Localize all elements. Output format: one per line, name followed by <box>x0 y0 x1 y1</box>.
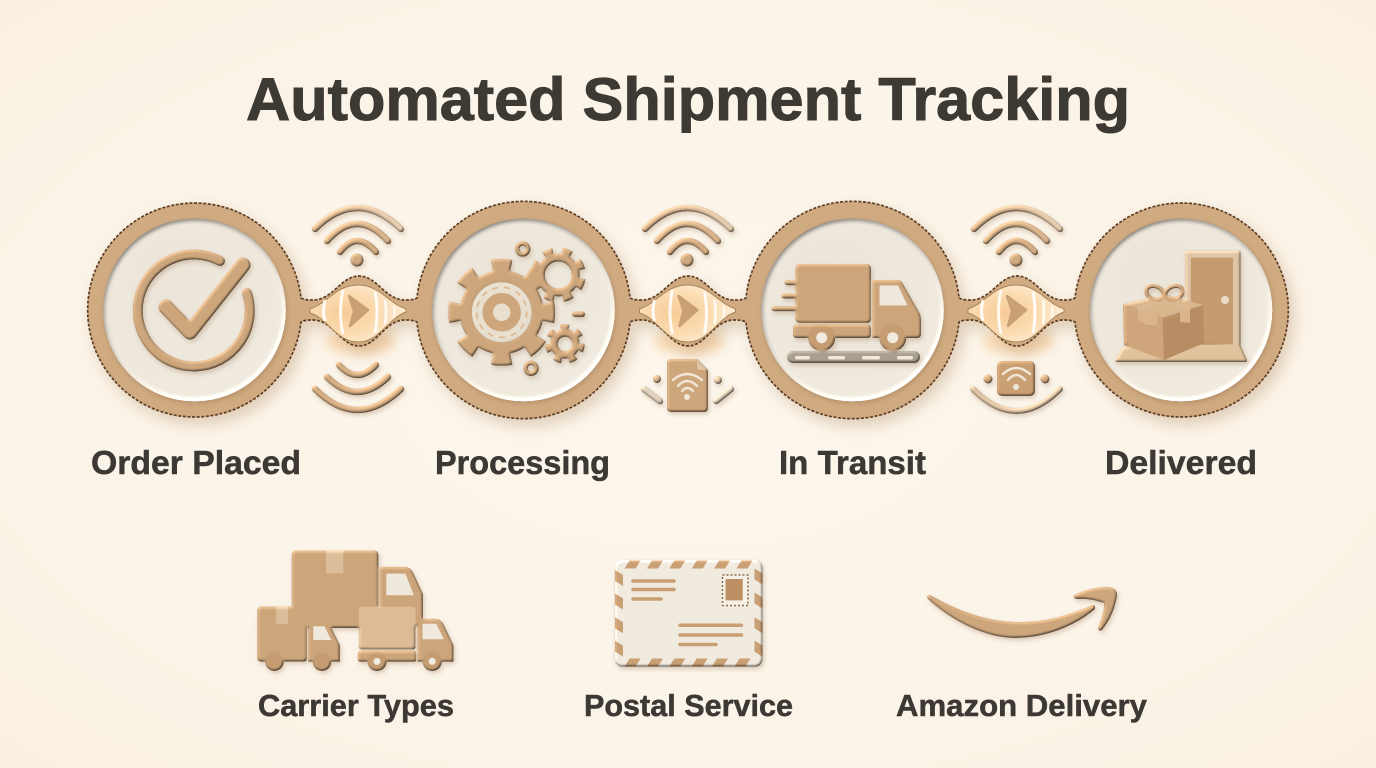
step 1: order placed disc <box>103 218 286 402</box>
connector 3: glowing arrow <box>968 285 1064 342</box>
icon: amazon smile arrow <box>927 587 1117 638</box>
label: amazon delivery: Amazon Delivery <box>896 689 1147 723</box>
label: carrier types: Carrier Types <box>258 689 454 723</box>
label: delivered: Delivered <box>1105 444 1257 481</box>
glow under connectors <box>324 329 1054 355</box>
step 4: delivered disc <box>1090 218 1272 402</box>
signal: inverted wifi below connector 1 <box>315 365 401 410</box>
small right truck <box>358 607 454 671</box>
step 2: processing disc <box>432 218 615 402</box>
label: in transit: In Transit <box>779 444 926 481</box>
signal: wifi document below connector 2 <box>644 359 731 412</box>
connector 2: glowing arrow <box>640 285 736 342</box>
label: processing: Processing <box>435 444 610 481</box>
icon: carrier trucks <box>257 550 454 671</box>
small left truck <box>257 607 340 671</box>
cardboard chain band <box>88 201 1288 419</box>
connector 1: glowing arrow <box>310 285 406 342</box>
signal: wifi above connector 1 <box>315 208 401 266</box>
icon: check mark in ring <box>138 254 250 366</box>
signal: wifi above connector 3 <box>974 208 1060 266</box>
label: postal service: Postal Service <box>584 689 793 723</box>
signal: wifi above connector 2 <box>645 208 731 266</box>
large truck <box>292 550 423 628</box>
icon: parcel at door <box>1115 251 1247 362</box>
signal: wifi chip below connector 3 <box>973 361 1060 411</box>
icon: gears <box>454 244 590 374</box>
step 3: in transit disc <box>761 218 944 402</box>
title: Automated Shipment Tracking <box>246 66 1130 133</box>
label: order placed: Order Placed <box>91 444 301 481</box>
icon: postal envelope <box>615 560 763 667</box>
icon: moving truck on road <box>774 264 921 363</box>
